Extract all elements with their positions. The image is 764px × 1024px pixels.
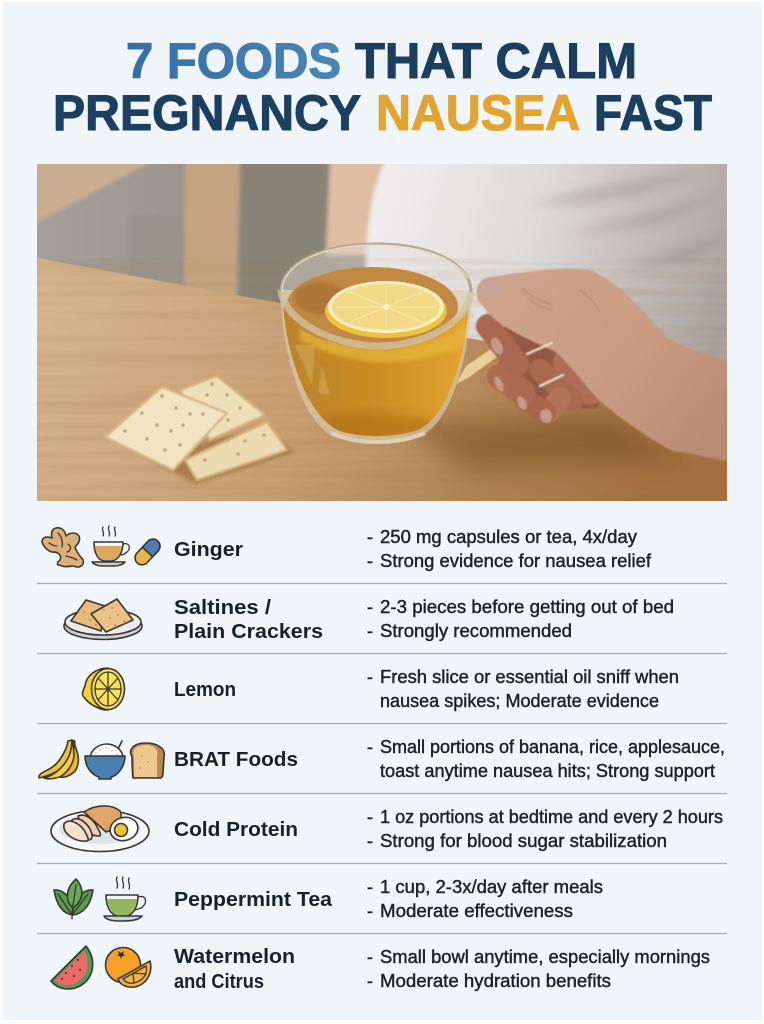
icon: toast (131, 743, 164, 778)
title: THAT CALM (355, 33, 637, 89)
icon: watermelon slice (51, 946, 93, 989)
label: Peppermint Tea (174, 888, 333, 911)
details (367, 527, 652, 571)
photo: tea with lemon, crackers and hand (30, 150, 740, 501)
details: - (367, 947, 373, 967)
label (174, 596, 323, 643)
icon: chicken and egg plate (51, 806, 149, 852)
details: - (367, 971, 373, 991)
row: Ginger (42, 526, 652, 571)
icon: green tea cup (104, 877, 146, 921)
label: BRAT Foods (174, 748, 298, 771)
details: - (367, 527, 373, 547)
details (367, 877, 603, 921)
details: Strong for blood sugar stabilization (380, 831, 667, 851)
icon: capsule (132, 536, 163, 568)
label (174, 945, 295, 993)
details: Small portions of banana, rice, applesauce, (380, 737, 725, 757)
details: - (367, 831, 373, 851)
details: 1 oz portions at bedtime and every 2 hours (380, 807, 723, 827)
back of hand and thumb (477, 269, 727, 461)
details: - (367, 901, 373, 921)
details: Fresh slice or essential oil sniff when (380, 667, 679, 687)
details: - (367, 621, 373, 641)
details: Small bowl anytime, especially mornings (380, 947, 710, 967)
details (367, 597, 674, 641)
details: - (367, 551, 373, 571)
details: - (367, 597, 373, 617)
icon: ginger root (42, 528, 83, 567)
details: 250 mg capsules or tea, 4x/day (380, 527, 637, 547)
label: and Citrus (174, 970, 264, 993)
icon: lemon half (82, 668, 124, 710)
title: FAST (594, 85, 712, 141)
label: Cold Protein (174, 818, 298, 841)
details: - (367, 667, 373, 687)
icon: orange with slice (106, 948, 151, 987)
details: - (367, 807, 373, 827)
icon: mint leaves (54, 879, 93, 919)
label: Watermelon (174, 945, 295, 968)
details (367, 807, 723, 851)
details: Moderate effectiveness (380, 901, 573, 921)
details: toast anytime nausea hits; Strong support (380, 761, 715, 781)
glass cup of tea (280, 244, 472, 443)
lemon slice (325, 281, 447, 338)
icon: crackers on a plate (64, 599, 142, 640)
row: Lemon (82, 667, 679, 711)
palm shadow and fingers (488, 325, 604, 424)
details: Strongly recommended (380, 621, 572, 641)
label: Plain Crackers (174, 620, 323, 643)
row dividers (37, 584, 727, 934)
row: Cold Protein (51, 806, 723, 852)
wooden table (37, 258, 727, 501)
title (53, 33, 712, 141)
shirt (363, 164, 727, 386)
crackers (105, 376, 295, 484)
label: Ginger (174, 538, 243, 561)
details (367, 667, 679, 711)
details: 1 cup, 2-3x/day after meals (380, 877, 603, 897)
details: nausea spikes; Moderate evidence (380, 691, 659, 711)
hand (477, 269, 727, 461)
title: PREGNANCY (53, 85, 361, 141)
title: 7 FOODS (126, 33, 341, 89)
row: Watermelon and Citrus (51, 945, 710, 993)
details: Strong evidence for nausea relief (380, 551, 652, 571)
details: - (367, 877, 373, 897)
cup handle (456, 305, 501, 384)
icon: bananas (39, 740, 78, 779)
details: - (367, 737, 373, 757)
row: BRAT Foods (39, 737, 725, 781)
details (367, 737, 725, 781)
details (367, 947, 710, 991)
label: Saltines / (174, 596, 271, 619)
details: Moderate hydration benefits (380, 971, 611, 991)
icon: cup of tea (92, 526, 129, 566)
icon: rice bowl (85, 741, 125, 779)
details: 2-3 pieces before getting out of bed (380, 597, 674, 617)
label: Lemon (174, 678, 236, 701)
row: Peppermint Tea (54, 877, 603, 921)
title: NAUSEA (376, 85, 580, 141)
row: Saltines (64, 596, 674, 643)
